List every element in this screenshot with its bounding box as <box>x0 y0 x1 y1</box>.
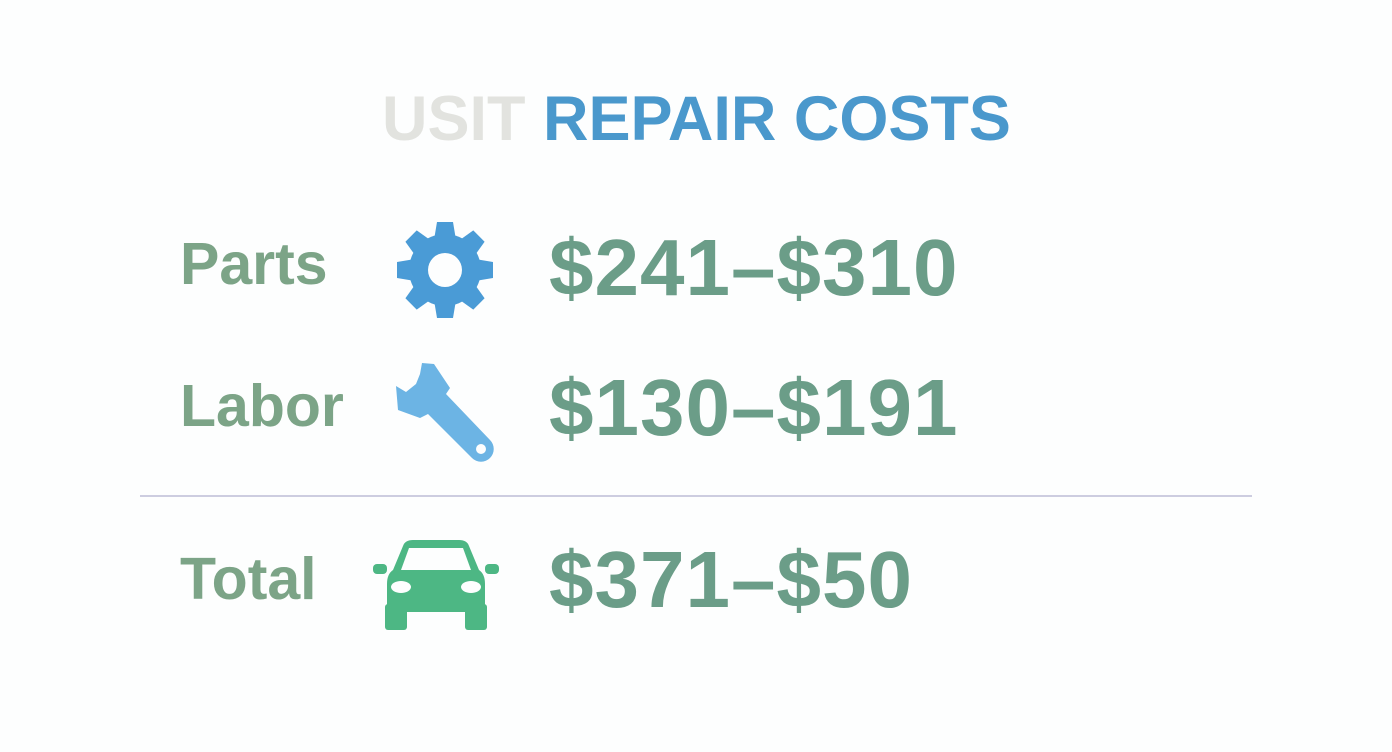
value: parts: $241–$310 <box>549 223 958 312</box>
icon: gear <box>397 222 493 318</box>
icon: car <box>373 540 499 630</box>
title: USIT REPAIR COSTS <box>382 84 1011 154</box>
label: labor: Labor <box>180 373 344 439</box>
value: total: $371–$50 <box>549 535 913 624</box>
label: parts: Parts <box>180 231 328 297</box>
value: labor: $130–$191 <box>549 363 958 452</box>
label: total: Total <box>180 546 317 612</box>
icon: wrench <box>396 363 494 462</box>
